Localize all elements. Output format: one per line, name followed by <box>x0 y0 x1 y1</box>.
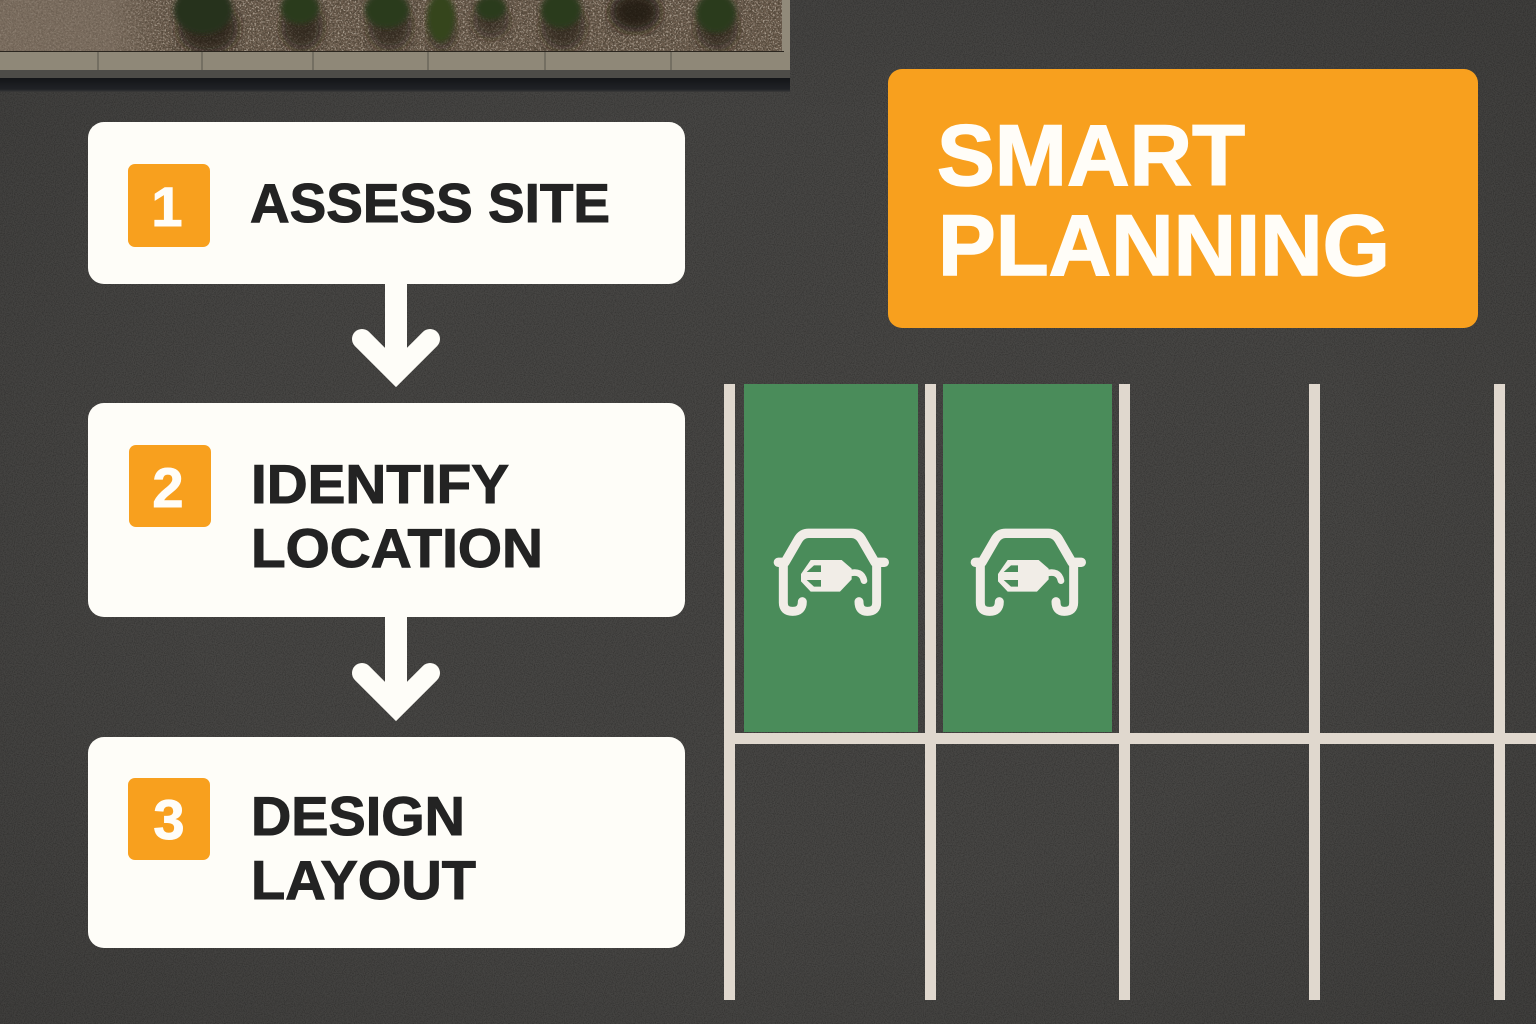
green EV parking bay 1 <box>744 384 918 732</box>
icon: number 1 badge: 1 <box>151 175 183 238</box>
parking line markings <box>724 384 1536 1000</box>
arrow: step 1 to step 2 <box>362 284 430 373</box>
panel: step 3 design layout <box>88 737 685 948</box>
title panel: smart planning <box>888 69 1478 328</box>
icon: number 1 badge <box>128 164 210 247</box>
icon: number 3 badge: 3 <box>153 788 185 851</box>
heading: design layout: LAYOUT <box>251 849 476 911</box>
icon: EV car with plug <box>778 533 884 611</box>
heading: assess site: ASSESS SITE <box>250 172 610 234</box>
heading: identify location: LOCATION <box>251 517 543 579</box>
icon: number 2 badge <box>129 445 211 527</box>
arrow: step 2 to step 3 <box>362 617 430 707</box>
icon: number 2 badge: 2 <box>152 456 184 519</box>
title: PLANNING <box>938 198 1390 294</box>
planter bed with curb <box>0 0 790 92</box>
heading: identify location: IDENTIFY <box>251 453 509 515</box>
icon: EV car with plug <box>975 533 1081 611</box>
panel: step 1 assess site <box>88 122 685 284</box>
green EV parking bay 2 <box>943 384 1112 732</box>
panel: step 2 identify location <box>88 403 685 617</box>
icon: number 3 badge <box>128 778 210 860</box>
heading: design layout: DESIGN <box>251 785 465 847</box>
title: SMART <box>937 108 1245 204</box>
parking lot layout <box>724 384 1536 1000</box>
